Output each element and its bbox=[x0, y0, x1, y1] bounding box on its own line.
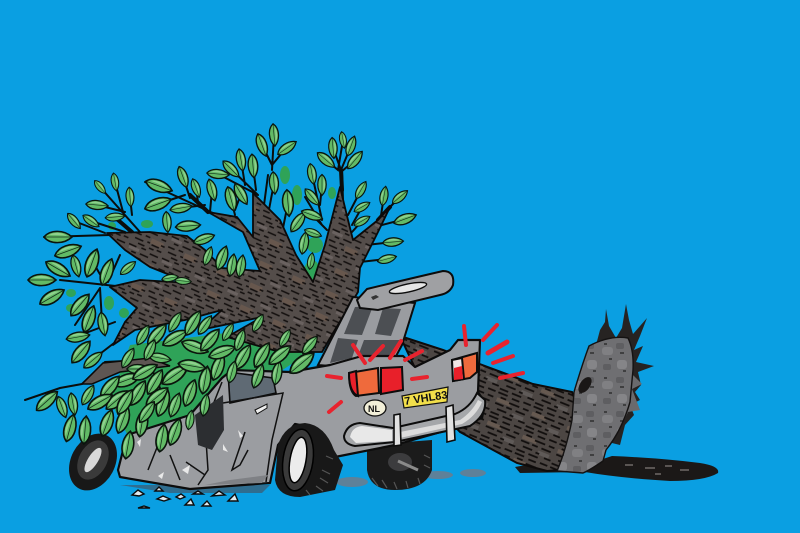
tailgate frame bbox=[318, 297, 415, 366]
tree stump shadow bbox=[515, 456, 718, 481]
door and crumple lines bbox=[148, 382, 283, 485]
rear wheel bbox=[367, 440, 432, 490]
license plate: 7 VHL83 bbox=[404, 389, 448, 408]
glass debris bbox=[132, 487, 238, 508]
side window bbox=[228, 372, 276, 403]
foliage backing blobs bbox=[66, 166, 336, 440]
stump splinters bbox=[596, 304, 654, 445]
car body bbox=[118, 340, 485, 489]
tree branches bbox=[25, 135, 405, 400]
trunk lid bbox=[357, 271, 453, 310]
tree crown limbs bbox=[107, 187, 390, 352]
tailgate windows bbox=[330, 306, 401, 363]
NL badge bbox=[364, 400, 386, 416]
red alarm flash lines bbox=[327, 325, 523, 412]
lower foliage leaves over car bbox=[33, 308, 321, 460]
crumple highlights bbox=[137, 430, 243, 479]
rear bumper bbox=[344, 393, 485, 446]
lower side limb bbox=[82, 358, 170, 384]
bumper guards bbox=[394, 405, 455, 446]
left front tire bbox=[59, 425, 127, 499]
upper foliage leaves bbox=[28, 123, 418, 371]
tail lights bbox=[349, 353, 477, 396]
fallen trunk bbox=[400, 336, 585, 471]
NL badge: NL bbox=[368, 404, 380, 414]
ground shadows bbox=[120, 469, 486, 493]
leaves in crown notches bbox=[161, 231, 247, 285]
front tire bbox=[275, 423, 343, 497]
stump bbox=[557, 304, 654, 473]
